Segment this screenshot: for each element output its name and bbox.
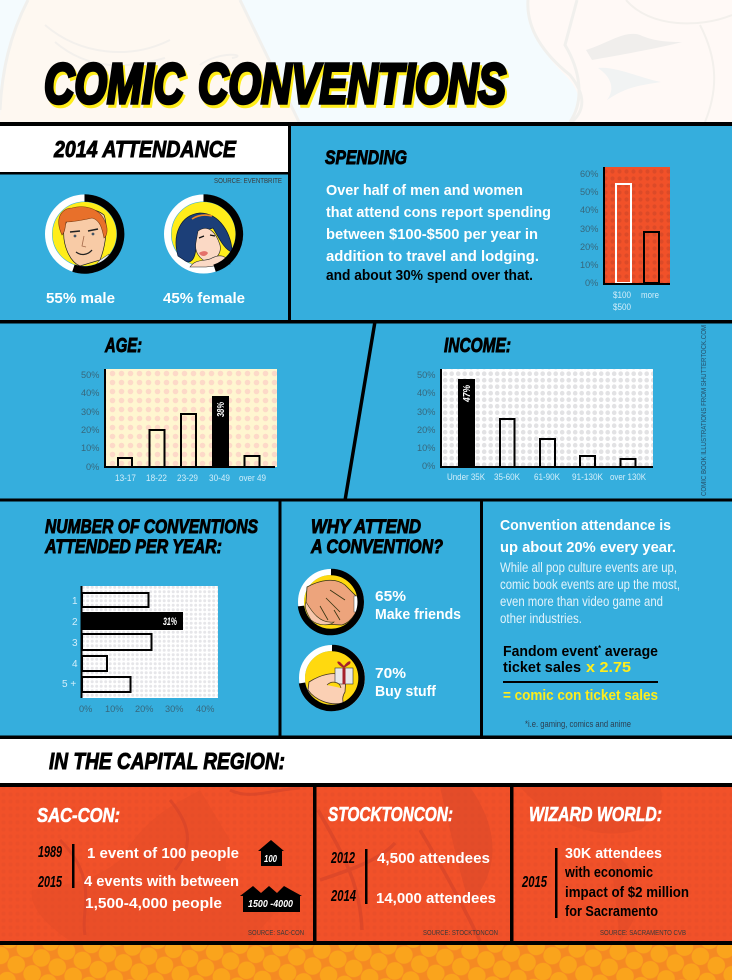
callout: ticket sales: = comic con ticket sales	[503, 687, 658, 704]
panel: orange capital region background	[0, 787, 732, 941]
callout: ticket sales: *	[598, 644, 602, 653]
text block: spending: Over half of men and women	[326, 182, 523, 199]
bar chart: spending: 40%	[580, 205, 598, 215]
heading: wizard world: WIZARD WORLD:	[529, 804, 662, 826]
icon: male face	[59, 207, 109, 267]
bar chart: age: over 49	[239, 473, 266, 484]
bar chart: age: 13-17	[115, 473, 136, 484]
panel: sac-con: SOURCE: SAC-CON	[248, 928, 304, 937]
text block: spending	[326, 182, 551, 284]
heading: in the capital region: IN THE CAPITAL REGION:	[49, 748, 285, 774]
bar chart: age	[81, 369, 277, 484]
title: COMIC	[44, 52, 185, 116]
text block: spending: between $100-$500 per year in	[326, 226, 538, 243]
icon: gift in hand	[308, 661, 353, 704]
text block: attendance growth: comic book events are up the most,	[500, 577, 680, 592]
text block: attendance growth: even more than video game and	[500, 594, 663, 609]
labels: why attend: 65%	[375, 588, 406, 605]
bar chart: conventions per year: 10%	[105, 704, 123, 714]
bar chart: spending: $100	[613, 290, 631, 301]
text block: attendance growth: While all pop culture events are up,	[500, 560, 677, 575]
panel: capital region heading band	[0, 739, 732, 784]
bar chart: spending: 60%	[580, 169, 598, 179]
text block: attendance growth: Convention attendance is	[500, 517, 671, 534]
bar chart: conventions per year: 1	[72, 596, 78, 607]
heading: stocktoncon: STOCKTONCON:	[328, 804, 453, 826]
panel: sac-con	[37, 805, 304, 937]
panel: wizard world	[521, 804, 689, 937]
credit: illustrations: COMIC BOOK ILLUSTRATIONS FROM SHUTTERTOCK.COM	[699, 325, 708, 496]
value label: 38%: 38%	[216, 402, 227, 417]
icon: handshake	[305, 580, 360, 625]
heading: number of conventions: NUMBER OF CONVENTIONS	[45, 517, 258, 538]
bar chart: income: 35-60K	[494, 472, 521, 483]
bar chart: conventions per year: 30%	[165, 704, 183, 714]
bar chart: income: 10%	[417, 443, 435, 453]
heading: why attend: WHY ATTEND	[311, 517, 421, 538]
panel: stocktoncon: SOURCE: STOCKTONCON	[423, 928, 498, 937]
value label: 31%: 31%	[163, 616, 177, 628]
text block: spending: and about 30% spend over that.	[326, 267, 533, 284]
text block: attendance growth: other industries.	[500, 611, 582, 626]
bar chart: age: 50%	[81, 370, 99, 380]
panel: stocktoncon: 2012	[330, 850, 355, 867]
callout: ticket sales	[503, 643, 658, 704]
bar chart: spending: more	[641, 290, 659, 301]
heading: age: AGE:	[104, 335, 142, 357]
callout: ticket sales: average	[601, 643, 658, 660]
panel: stocktoncon: 14,000 attendees	[376, 890, 496, 907]
label: 45% female: 45% female	[163, 290, 245, 307]
icon: handshake donut	[301, 572, 361, 632]
title	[44, 52, 508, 119]
labels: why attend	[375, 588, 461, 700]
heading: income: INCOME:	[444, 335, 511, 357]
icon: small house 100: 100	[264, 854, 277, 865]
title: CONVENTIONS	[198, 52, 506, 116]
labels: why attend: 70%	[375, 665, 406, 682]
panel: sac-con: 1 event of 100 people	[87, 845, 239, 862]
bar chart: age: 30-49	[209, 473, 230, 484]
value label: 47%: 47%	[462, 385, 473, 403]
bar chart: spending: $500	[613, 302, 631, 313]
bar chart: spending: 10%	[580, 260, 598, 270]
bar chart: age: 0%	[86, 462, 99, 472]
bar chart: income: 50%	[417, 370, 435, 380]
labels: why attend: Make friends	[375, 606, 461, 623]
panel: wizard world: SOURCE: SACRAMENTO CVB	[600, 928, 686, 937]
bar chart: conventions per year: 3	[72, 638, 78, 649]
text block: attendance growth: up about 20% every year.	[500, 539, 676, 556]
panel: wizard world: 2015	[521, 874, 548, 891]
title: COMIC	[46, 55, 187, 119]
panel: sac-con: 1,500-4,000 people	[85, 895, 222, 912]
panel: sac-con: 2015	[37, 874, 63, 891]
label: 55% male: 55% male	[46, 290, 115, 307]
heading: number of conventions	[44, 517, 258, 558]
bar chart: income: over 130K	[610, 472, 647, 483]
bar chart: spending: 50%	[580, 187, 598, 197]
bar chart: age: 40%	[81, 388, 99, 398]
bar chart: age: 23-29	[177, 473, 198, 484]
bar chart: age: 30%	[81, 407, 99, 417]
bar chart: conventions per year: 20%	[135, 704, 153, 714]
icon: male donut	[48, 198, 121, 270]
bar chart: income: 91-130K	[572, 472, 604, 483]
bar chart: conventions per year: 40%	[196, 704, 214, 714]
callout: ticket sales: Fandom event	[503, 643, 605, 660]
bar chart: age: 20%	[81, 425, 99, 435]
heading: sac-con: SAC-CON:	[37, 805, 120, 827]
bar chart: conventions per year	[62, 586, 218, 714]
bar chart: income: 40%	[417, 388, 435, 398]
icon: large houses 1500-4000: 1500 -4000	[248, 898, 293, 910]
heading: why attend	[310, 517, 443, 558]
text block: spending: addition to travel and lodging.	[326, 248, 539, 265]
bar chart: income: Under 35K	[447, 472, 486, 483]
header background illustration	[0, 0, 732, 122]
panel: wizard world: for Sacramento	[565, 903, 658, 920]
text block: spending: that attend cons report spending	[326, 204, 551, 221]
pattern strip	[0, 945, 732, 980]
labels: why attend: Buy stuff	[375, 683, 437, 700]
bar chart: conventions per year: 5 +	[62, 679, 76, 690]
text block: attendance growth	[500, 517, 680, 626]
heading: why attend: A CONVENTION?	[310, 537, 443, 558]
bar chart: income	[417, 369, 653, 483]
bar chart: conventions per year: 2	[72, 617, 78, 628]
icon: small house 100	[258, 840, 284, 866]
callout: ticket sales: ticket sales	[503, 659, 581, 676]
panel: attendance heading band	[0, 126, 288, 172]
bar chart: spending: 0%	[585, 278, 598, 288]
icon: female donut	[168, 198, 240, 270]
blue background panels	[0, 122, 732, 738]
bar chart: spending: 20%	[580, 242, 598, 252]
bar chart: income: 61-90K	[534, 472, 561, 483]
bar chart: age: 18-22	[146, 473, 167, 484]
bar chart: income: 20%	[417, 425, 435, 435]
bar chart: income: 0%	[422, 461, 435, 471]
icon: large houses 1500-4000	[240, 886, 302, 912]
panel: wizard world: impact of $2 million	[565, 884, 689, 901]
bar chart: spending: 30%	[580, 224, 598, 234]
icon: gift donut	[302, 648, 362, 708]
panel: wizard world: 30K attendees	[565, 845, 662, 862]
panel: wizard world: with economic	[564, 864, 653, 881]
bar chart: spending	[580, 167, 670, 313]
icon: female face	[176, 213, 232, 267]
bar chart: conventions per year: 4	[72, 659, 78, 670]
attendance source: SOURCE: EVENTBRITE	[214, 176, 282, 185]
heading: 2014 attendance: 2014 ATTENDANCE	[53, 136, 237, 162]
panel: sac-con: 4 events with between	[84, 873, 239, 890]
panel: stocktoncon	[328, 804, 498, 937]
bar chart: conventions per year: 0%	[79, 704, 92, 714]
footnote: *i.e. gaming, comics and anime	[525, 719, 631, 729]
panel: stocktoncon: 2014	[330, 888, 356, 905]
heading: spending: SPENDING	[325, 148, 407, 169]
title: CONVENTIONS	[200, 55, 508, 119]
bar chart: age: 10%	[81, 443, 99, 453]
heading: number of conventions: ATTENDED PER YEAR:	[44, 537, 222, 558]
panel: stocktoncon: 4,500 attendees	[377, 850, 490, 867]
bar chart: income: 30%	[417, 407, 435, 417]
panel: sac-con: 1989	[38, 844, 62, 861]
callout: ticket sales: x 2.75	[586, 659, 631, 676]
